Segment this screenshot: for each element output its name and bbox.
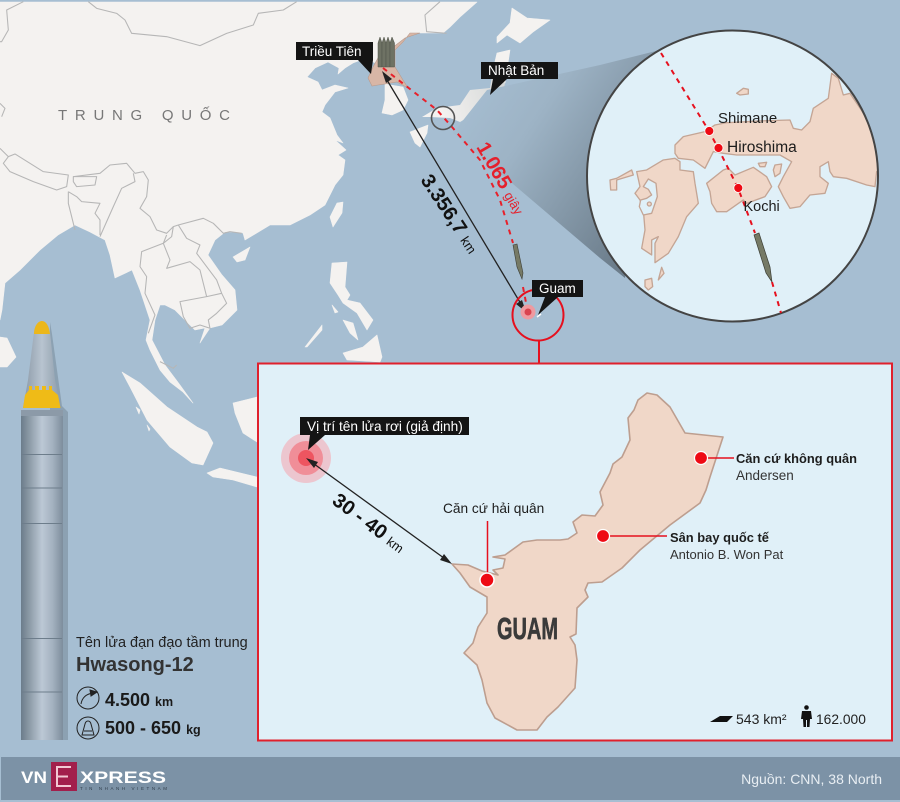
point: naval base: [443, 501, 544, 587]
stat: area: [710, 711, 787, 727]
Guam locator circle: [512, 290, 564, 364]
map: country borders: [0, 2, 447, 368]
point: Andersen air base: Căn cứ không quân: [736, 451, 857, 466]
label: impact position: Vị trí tên lửa rơi (giả định): [307, 419, 463, 434]
arrow: straight distance: [382, 71, 526, 312]
impact point: [281, 433, 331, 483]
icon: missile in circle: [754, 233, 772, 282]
point: Hiroshima: Hiroshima: [727, 139, 797, 156]
label: Triều Tiên: [296, 42, 373, 74]
point: Andersen air base: Andersen: [736, 468, 794, 483]
yellow nose tip: [34, 321, 50, 334]
stat: population: 162.000: [816, 712, 866, 727]
zoom cone: [453, 50, 660, 278]
point: Kochi: [734, 184, 780, 215]
label: Guam: [532, 280, 583, 315]
point: international airport: Antonio B. Won Pat: [670, 547, 784, 562]
stat: payload: 500 - 650 kg: [105, 718, 201, 738]
map: Asia land masses: [0, 2, 550, 487]
rocket: Hwasong-12: [21, 321, 68, 740]
text: missile name: Hwasong-12: [76, 654, 194, 676]
footer bar: [1, 757, 900, 800]
icon: small missile on route: [513, 244, 523, 279]
map: Guam island: [452, 393, 723, 730]
map: southern Japan islands: [610, 73, 882, 290]
distance label: 3.356,7 km: [416, 171, 484, 258]
logo: VnExpress: VN: [21, 768, 47, 787]
distance label: 30 - 40 km: 30 - 40 km: [328, 489, 410, 558]
point: Andersen air base: [694, 451, 857, 483]
point: Shimane: Shimane: [718, 110, 777, 127]
point: international airport: [596, 530, 784, 562]
icon: warhead: [77, 717, 99, 739]
label: Guam: Guam: [539, 281, 576, 296]
point: Shimane: [705, 110, 777, 136]
label: Nhật Bản: [481, 62, 558, 95]
label: Triều Tiên: Triều Tiên: [302, 44, 362, 59]
magnifier ring over Japan: [432, 106, 454, 130]
label: Nhật Bản: Nhật Bản: [488, 63, 544, 78]
route inside circle: [661, 53, 781, 313]
icon: range: [77, 687, 99, 709]
point: Kochi: Kochi: [744, 199, 780, 215]
map: North Korea highlight: [368, 33, 420, 88]
panel: Guam detail: [258, 364, 892, 740]
logo: VnExpress: XPRESS: [80, 768, 166, 787]
text: missile name: Tên lửa đạn đạo tầm trung: [76, 635, 248, 651]
logo: VnExpress: [21, 762, 167, 791]
map: missile launch icon: [378, 37, 394, 67]
text: missile name: [76, 635, 248, 676]
stat: range: 4.500 km: [105, 690, 173, 710]
point: international airport: Sân bay quốc tế: [670, 530, 770, 545]
label: GUAM: GUAM: [497, 611, 558, 646]
flight time label: 1.065 giây: [472, 138, 531, 219]
source: Nguồn: CNN, 38 North: [741, 771, 882, 787]
stat: area: 543 km²: [736, 711, 787, 727]
point: naval base: Căn cứ hải quân: [443, 501, 544, 516]
stat: population: [801, 705, 866, 727]
route: red dashed trajectory: [383, 68, 527, 308]
yellow collar: [23, 386, 60, 408]
arrow: 30-40 km: [306, 458, 452, 564]
panel: Japan zoom circle: [587, 30, 882, 322]
label: Trung Quốc: TRUNG QUỐC: [58, 106, 230, 124]
label: impact position: [300, 417, 469, 450]
logo: VnExpress: TIN NHANH VIETNAM: [80, 786, 167, 791]
